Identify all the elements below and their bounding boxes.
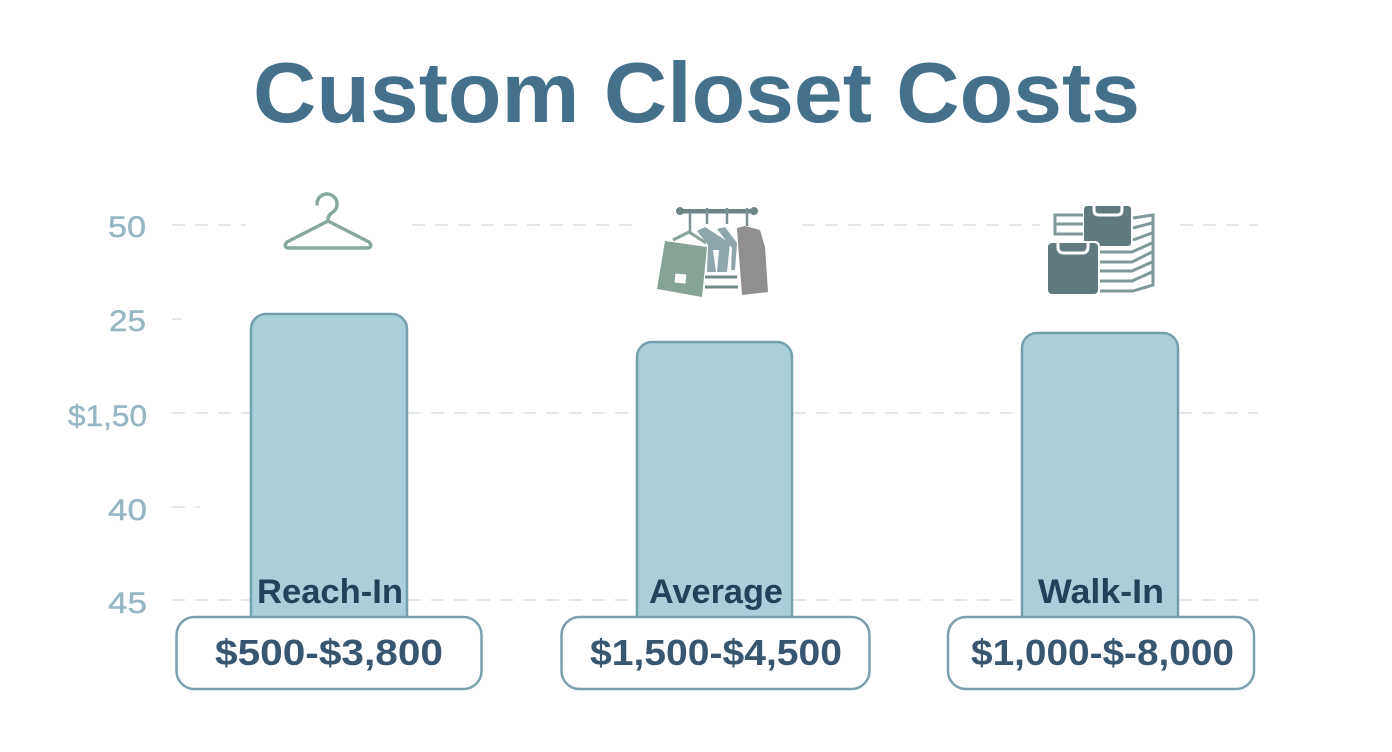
price box: Walk-In: $1,000-$-8,000 [971,632,1234,673]
price box: Walk-In [948,617,1254,689]
bar: Average [637,342,792,618]
y-axis labels: 25 [109,305,146,338]
icon: clothes rack [657,207,768,297]
y-axis labels: 50 [108,211,146,244]
bar: Walk-In [1022,333,1178,618]
category label: Reach-In: Reach-In [257,573,403,611]
icon: folded stacks [1046,205,1153,295]
price box: Reach-In: $500-$3,800 [215,632,443,673]
title: Custom Closet Costs [253,46,1140,141]
y-axis labels: $1,50 [68,400,147,433]
y-axis labels [68,211,147,620]
price box: Reach-In [176,617,482,689]
category label: Walk-In: Walk-In [1038,573,1164,611]
category label: Average: Average [649,573,783,611]
y-axis labels: 45 [108,587,147,620]
price box: Average [562,617,870,689]
icon: hanger [285,194,371,248]
bar: Reach-In [251,314,407,618]
price box: Average: $1,500-$4,500 [590,632,842,673]
y-axis labels: 40 [108,494,147,527]
